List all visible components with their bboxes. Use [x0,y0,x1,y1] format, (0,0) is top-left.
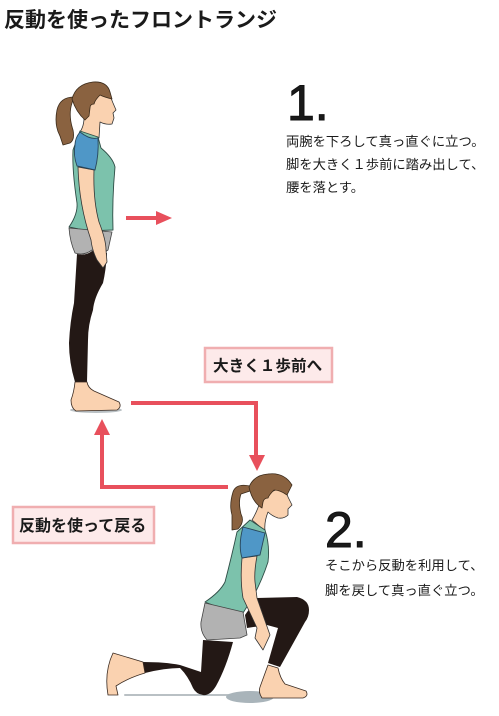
heading: step 2 number: 2. [325,502,367,558]
heading: step 1 number: 1. [287,75,329,131]
text block: step 1: 脚を大きく１歩前に踏み出して、 [286,156,484,172]
callout: big step forward: 大きく１歩前へ [213,356,323,375]
callout: return with recoil: 反動を使って戻る [19,517,146,535]
text block: step 1: 腰を落とす。 [286,180,364,195]
arrow: small right arrow [126,211,172,225]
lunge figure [107,474,309,703]
text block: step 2 [325,558,484,598]
callout: big step forward [205,348,332,382]
title: 反動を使ったフロントランジ [4,9,277,32]
text block: step 2: そこから反動を利用して、 [325,558,484,573]
arrow: back to standing [94,419,228,487]
text block: step 1 [286,134,485,195]
arrow: forward to lunge [131,403,265,471]
callout: return with recoil [13,507,154,543]
text block: step 1: 両腕を下ろして真っ直ぐに立つ。 [286,134,485,149]
standing figure [56,82,122,413]
text block: step 2: 脚を戻して真っ直ぐ立つ。 [325,582,484,598]
